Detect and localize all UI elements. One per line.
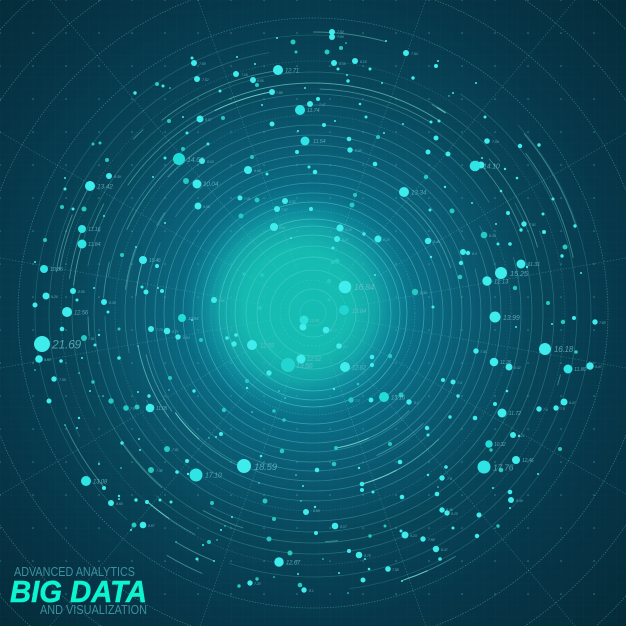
data point 14.10: 14.10 — [483, 164, 500, 170]
main title: BIG DATA — [10, 574, 147, 609]
small node labels: 7.52 — [202, 78, 210, 82]
small node labels: 8.39 — [114, 175, 122, 179]
data point 13.64 — [339, 305, 367, 315]
data point 13.34: 13.34 — [411, 190, 427, 196]
small node labels: 7.24 — [337, 35, 344, 39]
data point 11.31 — [516, 260, 540, 268]
small node labels: 8.09 — [339, 62, 347, 66]
small node labels: 8.62 — [279, 226, 287, 230]
data point 12.46 — [512, 456, 534, 464]
data point 11.72 — [498, 408, 521, 418]
data point 10.46 — [139, 256, 161, 264]
data point 13.56: 13.56 — [296, 363, 313, 370]
data point 13.42 — [85, 181, 113, 191]
small node labels: 7.97 — [281, 208, 289, 212]
data point 11.74: 11.74 — [307, 108, 319, 114]
small node labels: 8.47 — [441, 548, 449, 552]
small node labels: 7.47 — [319, 103, 327, 107]
small node labels: 8.39 — [489, 234, 497, 238]
data point 13.16 — [379, 392, 406, 402]
small node labels: 8.1 — [309, 589, 314, 593]
data point 11.05: 11.05 — [156, 406, 168, 412]
small node labels: 7.91 — [88, 337, 95, 341]
data point 13.64: 13.64 — [352, 309, 367, 315]
small node labels: 7.54 — [337, 30, 344, 34]
data point 12.52 — [296, 354, 322, 364]
small node labels: 8.54 — [183, 336, 190, 340]
data point 11.16: 11.16 — [88, 227, 101, 233]
small node labels: 8.25 — [451, 512, 459, 516]
small node labels: 8.24 — [345, 228, 352, 232]
data point 15.25: 15.25 — [510, 269, 529, 278]
data point 12.71 — [273, 65, 299, 75]
data point 13.08 — [81, 476, 108, 486]
data point 21.69: 21.69 — [51, 338, 82, 352]
small node labels: 7.20 — [254, 582, 262, 586]
small node labels: 8.60 — [116, 502, 124, 506]
data point 10.86 — [40, 265, 64, 273]
small node labels: 7.16 — [241, 73, 249, 77]
data point 10.86: 10.86 — [50, 267, 64, 273]
small node labels: 9.23 — [410, 534, 418, 538]
small node labels: 8.55 — [78, 290, 86, 294]
data point 12.71: 12.71 — [285, 68, 299, 74]
small node labels: 8.46 — [446, 508, 454, 512]
small node labels: 7.58 — [392, 568, 400, 572]
data point 16.18 — [539, 343, 574, 355]
data point 16.18: 16.18 — [554, 345, 574, 354]
data point 16.84: 16.84 — [354, 282, 375, 292]
data point 11.84 — [78, 240, 100, 248]
small node labels: 7.4 — [457, 381, 462, 385]
data point 13.34 — [399, 187, 427, 197]
small node labels: 7.6 — [543, 408, 549, 412]
small node labels: 7.6 — [447, 477, 453, 481]
data point 11.05 — [146, 404, 168, 412]
data point 12.55 — [247, 340, 275, 350]
small node labels: 8.07 — [340, 525, 348, 529]
small node labels: 7.94 — [411, 52, 418, 56]
small node labels: 7.89 — [199, 62, 207, 66]
data point 11.80 — [564, 364, 587, 374]
data point 17.10 — [190, 468, 222, 482]
small node labels: 7.88 — [276, 91, 284, 95]
small node labels: 7.85 — [599, 321, 607, 325]
data point 10.94: 10.94 — [188, 316, 199, 321]
data point 13.08: 13.08 — [93, 480, 108, 486]
small node labels: 8.15 — [360, 60, 368, 64]
small node labels: 7.47 — [156, 469, 164, 473]
data point 12.56 — [62, 307, 89, 317]
data point 16.84 — [339, 281, 375, 293]
subtitle bottom: AND VISUALIZATION — [40, 603, 147, 617]
small node labels: 9.96 — [254, 169, 262, 173]
data points: dim nodes — [43, 40, 578, 588]
data point 12.55: 12.55 — [260, 344, 275, 350]
data point 12.62: 12.62 — [352, 366, 367, 372]
small node labels: 8.05 — [355, 149, 363, 153]
data point 13.99 — [490, 312, 520, 322]
data point 13.16: 13.16 — [391, 396, 406, 402]
small node labels: 7.41 — [244, 197, 251, 201]
small node labels: 7.92 — [529, 223, 537, 227]
data point 12.56: 12.56 — [74, 310, 89, 316]
small node labels: 8.56 — [257, 79, 265, 83]
small node labels: 7.96 — [218, 299, 226, 303]
data point 12.62 — [340, 362, 367, 372]
subtitle top: ADVANCED ANALYTICS — [14, 565, 135, 579]
concentric rings — [35, 35, 591, 591]
small node labels: 8.1 — [414, 401, 419, 405]
small node labels: 8.71 — [172, 330, 179, 334]
small node labels: 8.3 — [472, 252, 478, 256]
small node labels: 7.8 — [560, 407, 566, 411]
data point 17.76: 17.76 — [493, 462, 514, 472]
small node labels: 9.05 — [203, 205, 211, 209]
small node labels: 8.10 — [207, 160, 215, 164]
data point 12.13: 12.13 — [494, 280, 509, 286]
data point 18.59: 18.59 — [254, 462, 278, 473]
data point 10.46: 10.46 — [149, 258, 161, 264]
data point 11.26 — [490, 358, 512, 366]
data point 12.67 — [274, 557, 301, 567]
data point 13.42: 13.42 — [97, 184, 113, 190]
data point 11.06: 11.06 — [309, 318, 320, 323]
data point 11.72: 11.72 — [508, 411, 521, 417]
small node labels: 8.89 — [313, 509, 321, 513]
small node labels: 7.2 — [355, 399, 361, 403]
data point 10.32: 10.32 — [494, 442, 506, 448]
data point 15.25 — [495, 267, 529, 279]
small node labels: 8.75 — [364, 554, 372, 558]
data point 11.26: 11.26 — [500, 360, 512, 366]
small node labels: 7.9 — [130, 407, 136, 411]
data point 14.10 — [470, 161, 500, 171]
data point 18.59 — [237, 459, 278, 473]
small node labels: 7.79 — [156, 328, 164, 332]
data point 13.56 — [281, 358, 313, 372]
data point 14.60: 14.60 — [187, 157, 204, 164]
small node labels: 9.26 — [51, 295, 59, 299]
data point 12.13 — [482, 276, 509, 286]
data point 11.54: 11.54 — [313, 139, 325, 145]
small node labels: 8.7 — [343, 345, 349, 349]
data point 11.31: 11.31 — [528, 262, 540, 268]
data point 11.74 — [295, 105, 319, 115]
small node labels: 8.49 — [516, 499, 524, 503]
data point 10.94 — [178, 314, 199, 322]
small node labels: 7.81 — [172, 448, 179, 452]
small node labels: 9.88 — [44, 358, 52, 362]
small node labels: 8.42 — [514, 366, 522, 370]
small node labels: 7.09 — [492, 140, 500, 144]
data point 11.06 — [300, 316, 320, 324]
data point 10.04: 10.04 — [203, 181, 219, 188]
small node labels: 8.29 — [383, 238, 391, 242]
small node labels: 8.27 — [342, 238, 350, 242]
data point 14.60 — [173, 153, 204, 165]
data point 11.54 — [300, 136, 325, 146]
data point 11.84: 11.84 — [88, 242, 100, 248]
small node labels: 8.87 — [148, 524, 156, 528]
data point 12.67: 12.67 — [286, 560, 301, 566]
small node labels: 8.39 — [420, 291, 428, 295]
small node labels: 8.21 — [518, 434, 525, 438]
small node labels: 8.57 — [205, 118, 213, 122]
small node labels: 8.32 — [289, 200, 297, 204]
data point 21.69 — [34, 336, 82, 352]
data point 17.10: 17.10 — [205, 472, 222, 480]
small node labels: 8.77 — [330, 329, 338, 333]
data point 10.04 — [192, 180, 219, 188]
small node labels: 8.45 — [433, 240, 441, 244]
small node labels: 7.41 — [480, 350, 487, 354]
data point 12.52: 12.52 — [307, 357, 322, 363]
small node labels: 7.68 — [428, 538, 436, 542]
title block — [10, 565, 147, 617]
data point 13.99: 13.99 — [503, 315, 520, 322]
data point 10.32 — [485, 440, 506, 448]
data point 11.80: 11.80 — [574, 367, 587, 373]
small node labels: 9.47 — [595, 365, 603, 369]
small node labels: 7.59 — [59, 378, 67, 382]
data point 17.76 — [478, 460, 514, 474]
data point 11.16 — [78, 225, 101, 233]
data point 12.46: 12.46 — [522, 458, 534, 464]
small node labels: 8.39 — [109, 301, 117, 305]
small node labels: 9.47 — [569, 401, 577, 405]
